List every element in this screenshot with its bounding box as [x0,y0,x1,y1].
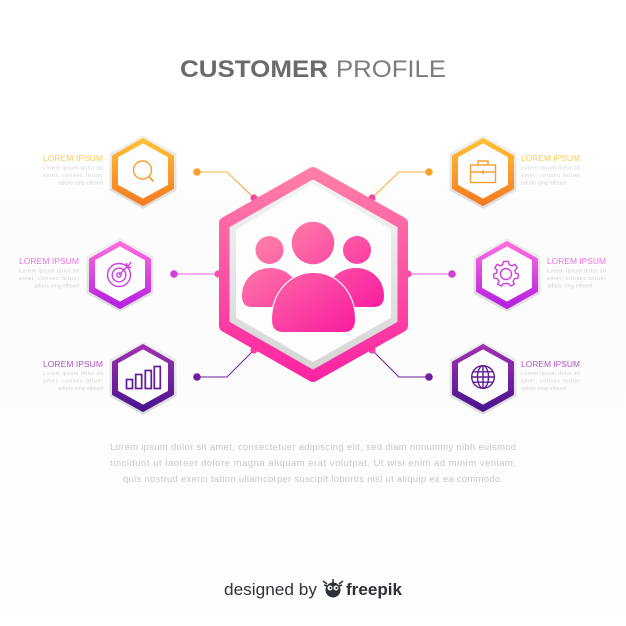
text block: bottom left: adipis cing elitsed [58,386,103,392]
text block: middle left: LOREM IPSUM [19,256,79,266]
hexagon: briefcase [451,137,515,207]
connector: bottom left [193,350,254,381]
icon: target [108,262,131,286]
central hexagon [214,173,412,376]
text block: top right: Lorem ipsum dolor sit [521,166,580,172]
icon: gear [494,262,518,286]
text block: bottom right: Lorem ipsum dolor sit [521,371,580,377]
text block: bottom left: LOREM IPSUM [43,359,103,369]
text block: top left: LOREM IPSUM [43,153,103,163]
paragraph: quis nostrud exerci tation ullamcorper suscipit lobortis nisl ut aliquip ex ea commodo. [123,473,503,484]
text block: middle left [19,256,80,290]
text block: bottom right [521,359,580,392]
text block: middle right: adipis cing elitsed [547,284,592,290]
icon: globe [472,366,494,388]
paragraph [110,441,516,484]
text block: middle left: adipis cing elitsed [34,284,79,290]
text block: middle right: Lorem ipsum dolor sit [547,268,606,274]
footer: designed by freepik [224,579,403,599]
text block: middle left: Lorem ipsum dolor sit [19,268,80,274]
connector: top right [372,168,433,198]
hexagon: gear [475,240,539,310]
text block: bottom right: adipis cing elitsed [521,386,566,392]
text block: middle right: LOREM IPSUM [547,256,606,266]
text block: bottom right: amet, consec tetuer [521,378,580,384]
hexagon: target [88,240,152,310]
text block: top right: LOREM IPSUM [521,153,580,163]
icon: magnifier [134,161,154,182]
text block: top left: Lorem ipsum dolor sit [43,166,104,172]
icon: customer group [242,222,384,332]
hexagon: globe [451,343,515,413]
icon: bars [126,366,160,388]
footer: designed by freepik: designed by [224,580,318,599]
icon: freepik mascot [323,579,343,598]
hexagon: search [111,137,175,207]
text block: bottom left: Lorem ipsum dolor sit [43,371,104,377]
paragraph: tincidunt ut laoreet dolore magna aliquam erat volutpat. Ut wisi enim ad minim veniam, [110,457,516,468]
text block: top left [43,153,104,186]
hexagon: bar chart [111,343,175,413]
text block: top right: amet, consec tetuer [521,173,580,179]
text block: bottom right: LOREM IPSUM [521,359,580,369]
connector: middle right [408,270,456,278]
connector: middle left [170,270,218,278]
text block: bottom left: amet, consec tetuer [43,378,103,384]
text block: middle right [547,256,606,290]
text block: top left: amet, consec tetuer [43,173,103,179]
text block: middle left: amet, consec tetuer [19,276,79,282]
text block: top left: adipis cing elitsed [58,180,103,186]
text block: middle right: amet, consec tetuer [547,276,606,282]
text block: top right: adipis cing elitsed [521,180,566,186]
connector: top left [193,168,254,198]
icon: briefcase [470,161,496,182]
title: CUSTOMER [180,56,328,83]
text block: top right [521,153,580,186]
paragraph: Lorem ipsum dolor sit amet, consectetuer adipiscing elit, sed diam nonummy nibh euismod [110,441,516,452]
connector: bottom right [372,350,433,381]
footer: designed by freepik: freepik [346,580,403,599]
title: PROFILE [336,56,446,83]
text block: bottom left [43,359,104,392]
